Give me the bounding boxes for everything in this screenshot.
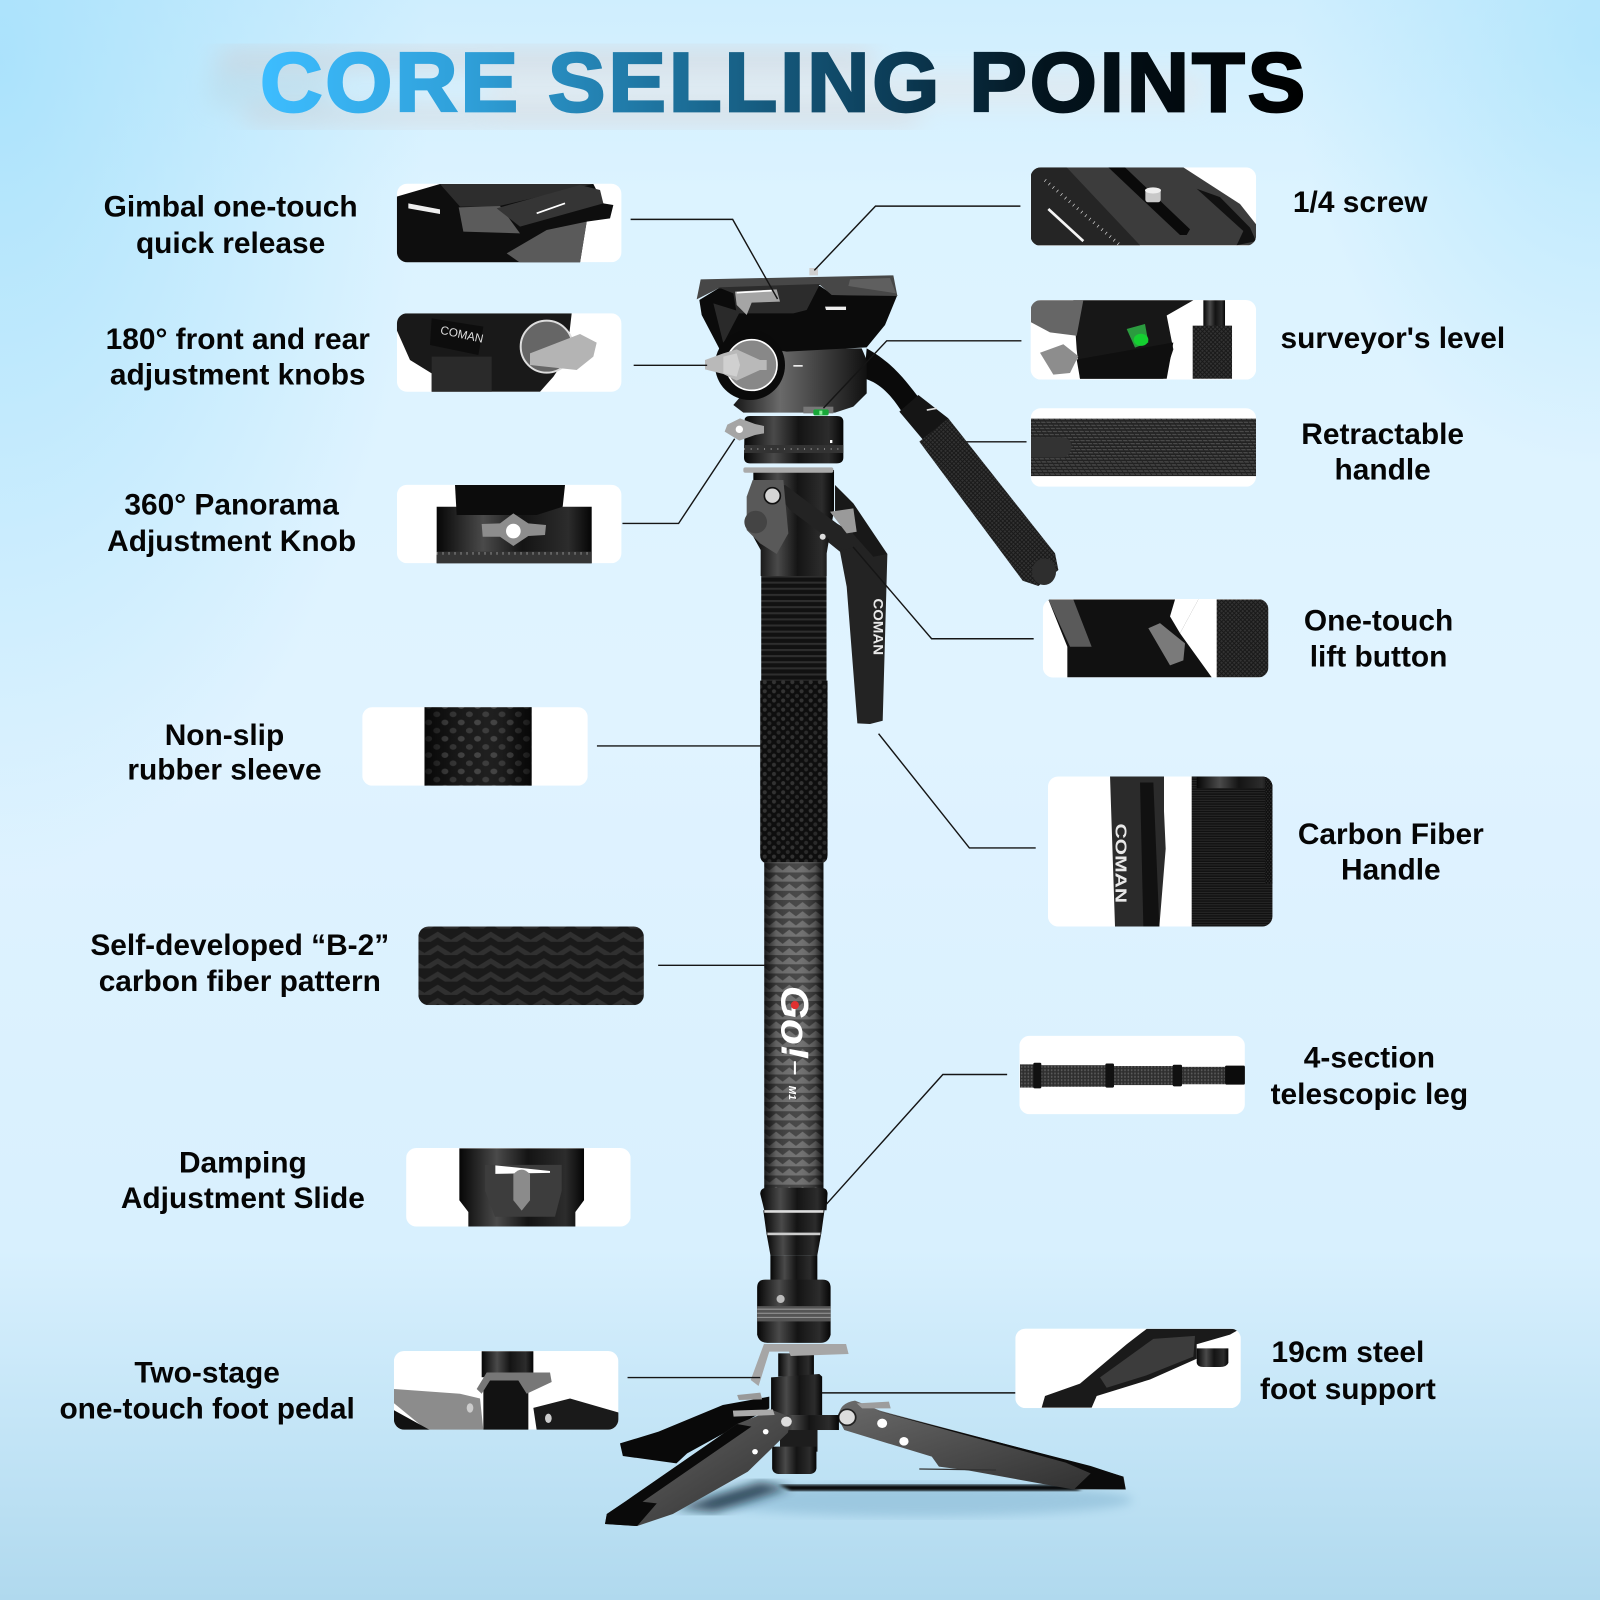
label: damping slide: Adjustment Slide xyxy=(121,1182,365,1215)
lower collars xyxy=(760,1188,828,1282)
tilt ball and knob xyxy=(705,330,803,400)
label: gimbal quick release: quick release xyxy=(136,227,325,260)
label: lift button: One-touch xyxy=(1304,605,1453,638)
COMAN lever mark: COMAN xyxy=(871,598,887,655)
thumbnail: foot pedal xyxy=(394,1351,619,1430)
base and foot legs xyxy=(605,1344,1126,1526)
thumbnail: lift button xyxy=(1043,599,1268,678)
head cylinder xyxy=(733,348,867,413)
right leg xyxy=(839,1401,1126,1489)
lift lever xyxy=(768,485,887,724)
thumbnail: telescopic leg xyxy=(1019,1036,1245,1114)
label: panorama knob: Adjustment Knob xyxy=(107,525,356,558)
thumbnail: surveyor level xyxy=(1031,300,1256,380)
front left leg xyxy=(605,1393,792,1526)
label: rubber sleeve: Non-slip xyxy=(165,719,284,752)
label: foot pedal: one-touch foot pedal xyxy=(59,1392,355,1425)
label: rubber sleeve: rubber sleeve xyxy=(127,754,322,787)
pedal flange xyxy=(751,1344,849,1386)
label: steel foot: foot support xyxy=(1260,1373,1436,1406)
brand logo on tube xyxy=(773,986,816,1100)
label: panorama knob: 360° Panorama xyxy=(124,488,339,521)
bracket with pivot xyxy=(744,480,857,554)
thumbnail: panorama knob xyxy=(397,485,621,564)
label: steel foot: 19cm steel xyxy=(1272,1336,1424,1369)
thumbnail: adjustment knobs xyxy=(397,313,621,392)
label: adjustment knobs: adjustment knobs xyxy=(110,359,366,392)
label: carbon pattern: Self-developed “B-2” xyxy=(90,929,389,962)
COMAN mark: COMAN xyxy=(1111,823,1128,903)
brand logo on tube: Go! xyxy=(773,986,816,1059)
thumbnail: carbon pattern xyxy=(418,927,644,1005)
central post xyxy=(771,1353,839,1430)
label: carbon handle: Carbon Fiber xyxy=(1298,818,1484,851)
pan knob xyxy=(725,418,764,441)
brand logo on tube: M1 xyxy=(786,1086,797,1100)
lever arm over neck xyxy=(773,485,857,550)
title: CORE SELLING POINTS xyxy=(260,35,1308,129)
label: foot pedal: Two-stage xyxy=(134,1357,280,1390)
label: carbon pattern: carbon fiber pattern xyxy=(99,965,381,998)
label: damping slide: Damping xyxy=(179,1146,307,1179)
thumbnail: handle texture xyxy=(1031,408,1256,487)
label: lift button: lift button xyxy=(1310,640,1447,673)
label: adjustment knobs: 180° front and rear xyxy=(106,323,370,356)
ribbed grip xyxy=(761,576,827,682)
COMAN mark: COMAN xyxy=(439,324,485,346)
leader lines xyxy=(597,206,1036,1393)
label: telescopic leg: telescopic leg xyxy=(1271,1078,1468,1111)
dotted rubber sleeve xyxy=(760,681,828,863)
thumbnail: steel foot xyxy=(1015,1329,1241,1408)
label: retractable handle: handle xyxy=(1335,454,1431,487)
pan base xyxy=(743,416,843,473)
floor shadow xyxy=(673,1482,1133,1516)
thumbnail: gimbal quick release xyxy=(397,184,621,263)
carbon fiber tube xyxy=(764,862,823,1191)
label: surveyor level: surveyor's level xyxy=(1281,322,1505,355)
label: gimbal quick release: Gimbal one-touch xyxy=(104,190,358,223)
thumbnail: rubber sleeve xyxy=(362,707,588,786)
panning handle xyxy=(864,348,1058,586)
head plate xyxy=(697,268,897,352)
video head with lever and handle xyxy=(697,268,1058,724)
back leg xyxy=(620,1397,769,1463)
locking collar xyxy=(757,1280,831,1343)
label: 1/4 screw: 1/4 screw xyxy=(1293,186,1428,219)
thumbnail: carbon handle xyxy=(1048,776,1273,927)
label: telescopic leg: 4-section xyxy=(1304,1041,1435,1074)
monopod column xyxy=(757,576,831,1343)
label: retractable handle: Retractable xyxy=(1301,418,1464,451)
title backdrop streaks xyxy=(209,51,1204,122)
surveyor level xyxy=(803,407,833,415)
thumbnail: damping slide xyxy=(406,1148,631,1227)
thumbnail: 1/4 screw xyxy=(1031,167,1256,246)
label: carbon handle: Handle xyxy=(1341,854,1441,887)
spindle screw xyxy=(772,1428,818,1474)
neck xyxy=(753,470,887,576)
